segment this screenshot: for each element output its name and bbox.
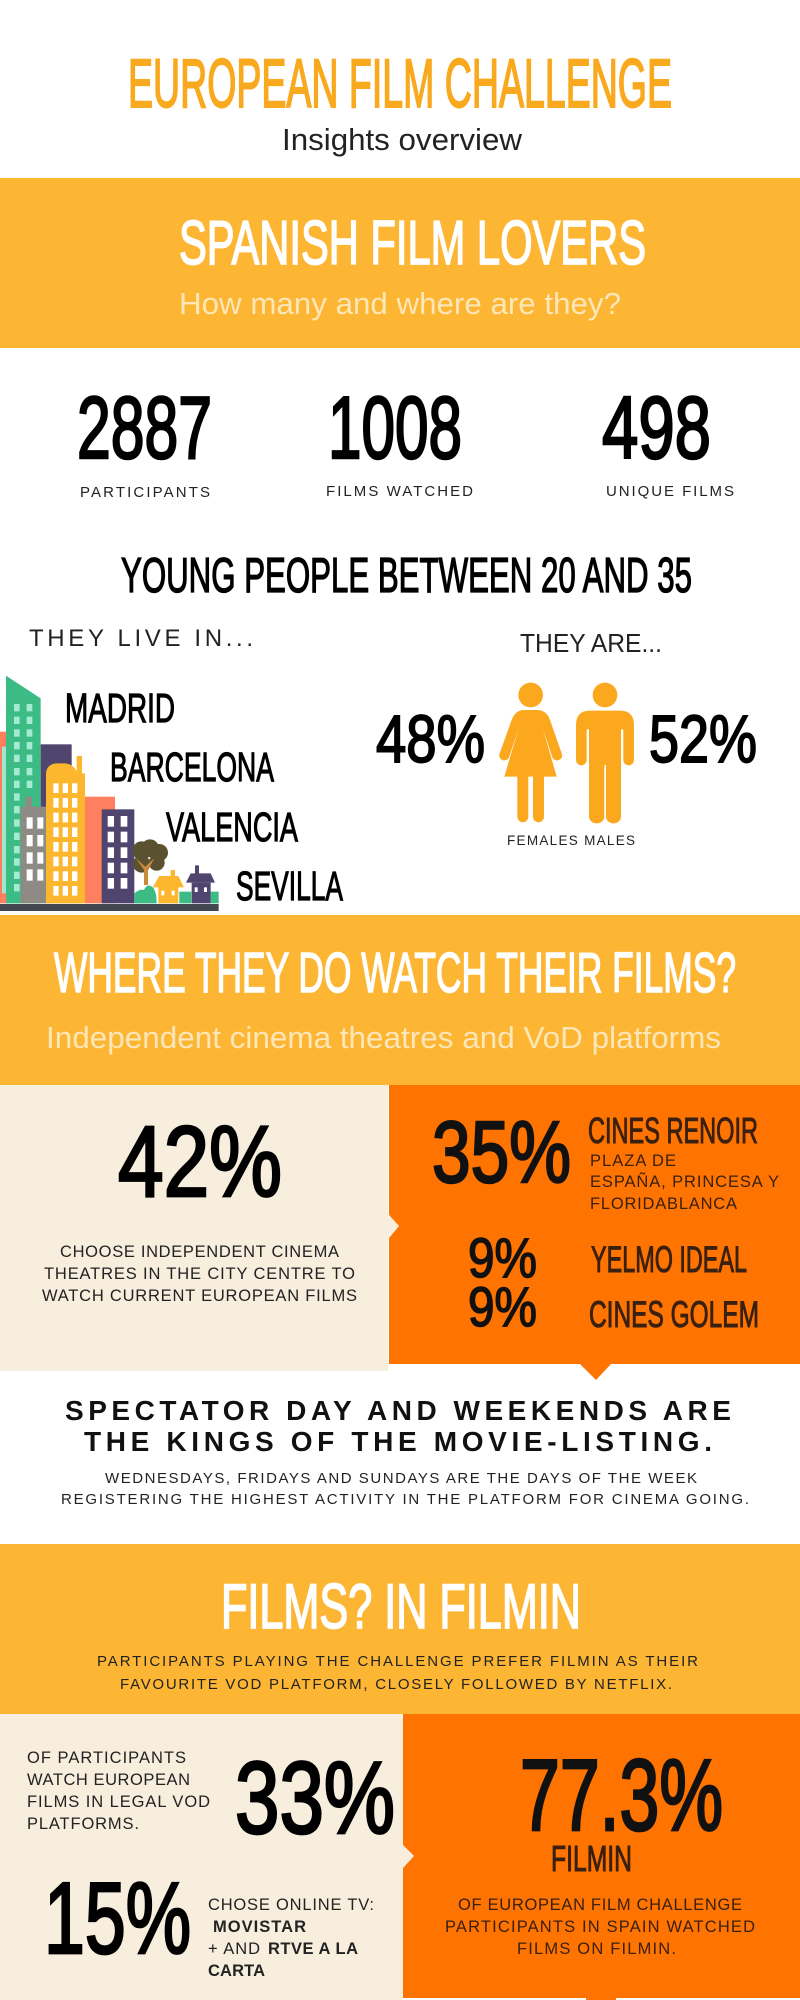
banner: films in Filmin <box>0 1544 800 1714</box>
stat: 9 percent second: 9% <box>468 1275 537 1338</box>
section text: REGISTERING THE HIGHEST ACTIVITY IN THE PLATFORM FOR CINEMA GOING. <box>61 1491 749 1508</box>
icon: female figure <box>499 683 562 822</box>
banner: Spanish film lovers <box>0 178 800 348</box>
section text <box>61 1470 749 1508</box>
text: participants legal VoD: FILMS IN LEGAL VOD <box>27 1793 210 1811</box>
banner text <box>97 1653 698 1693</box>
text: online TV: + AND <box>208 1940 260 1958</box>
label: they live in: THEY LIVE IN... <box>29 625 253 652</box>
city list <box>65 685 343 909</box>
stat: 9 percent: 9% <box>468 1226 537 1289</box>
banner subheading: Independent cinema theatres and VoD platforms <box>46 1020 721 1055</box>
panel text: PARTICIPANTS IN SPAIN WATCHED <box>445 1918 755 1936</box>
panel text <box>42 1243 357 1305</box>
stat: 48 percent females: 48% <box>376 702 485 777</box>
panel text: WATCH CURRENT EUROPEAN FILMS <box>42 1287 357 1305</box>
text: participants legal VoD: OF PARTICIPANTS <box>27 1749 186 1767</box>
stat: participants <box>77 378 212 501</box>
stat: 15 percent: 15% <box>44 1863 191 1975</box>
city: Barcelona: BARCELONA <box>110 744 274 790</box>
stat: unique films: UNIQUE FILMS <box>606 483 734 500</box>
city: Valencia: VALENCIA <box>166 804 298 850</box>
text: online TV: CARTA <box>208 1962 265 1980</box>
gender split <box>376 683 757 848</box>
cinema locations: FLORIDABLANCA <box>590 1195 737 1213</box>
label: they are: THEY ARE... <box>520 628 662 658</box>
banner text: PARTICIPANTS PLAYING THE CHALLENGE PREFER FILMIN AS THEIR <box>97 1653 698 1670</box>
text: online TV: CHOSE ONLINE TV: <box>208 1896 374 1914</box>
stat: films watched <box>326 378 473 500</box>
panel text: OF EUROPEAN FILM CHALLENGE <box>458 1896 742 1914</box>
icon: city skyline <box>0 676 219 911</box>
cinema locations: ESPAÑA, PRINCESA Y <box>590 1171 779 1191</box>
panel text <box>445 1896 755 1958</box>
cinema locations: PLAZA DE <box>590 1152 676 1170</box>
subtitle: Insights overview <box>282 122 523 157</box>
icon: male figure <box>576 683 634 823</box>
panel: cinema ranking <box>389 1085 800 1380</box>
key stats row <box>77 378 734 501</box>
section heading <box>65 1395 731 1457</box>
labels: females males: FEMALES MALES <box>507 833 635 848</box>
stat: participants: 2887 <box>77 378 212 477</box>
text: online TV: MOVISTAR <box>213 1918 306 1936</box>
text: online TV <box>208 1896 374 1980</box>
stat: 42 percent: 42% <box>118 1106 282 1218</box>
cinema locations <box>590 1152 779 1213</box>
panel text: THEATRES IN THE CITY CENTRE TO <box>44 1265 355 1283</box>
label: Filmin: FILMIN <box>551 1838 632 1879</box>
section: spectator day <box>61 1395 749 1508</box>
stat: films watched: 1008 <box>328 378 462 477</box>
text: participants legal VoD: PLATFORMS. <box>27 1815 139 1833</box>
banner subheading: How many and where are they? <box>179 286 621 321</box>
city: Madrid: MADRID <box>65 685 175 731</box>
banner text: FAVOURITE VOD PLATFORM, CLOSELY FOLLOWED BY NETFLIX. <box>120 1676 672 1693</box>
panel: independent cinema <box>0 1085 399 1371</box>
stat: participants: PARTICIPANTS <box>80 484 210 501</box>
header <box>128 45 672 157</box>
banner heading: FILMS? IN FILMIN <box>221 1572 581 1642</box>
stat: unique films: 498 <box>602 378 711 477</box>
panel text: CHOOSE INDEPENDENT CINEMA <box>60 1243 339 1261</box>
section text: WEDNESDAYS, FRIDAYS AND SUNDAYS ARE THE DAYS OF THE WEEK <box>105 1470 697 1487</box>
text: participants legal VoD: WATCH EUROPEAN <box>27 1771 190 1789</box>
text: online TV: RTVE A LA <box>268 1940 358 1958</box>
panel: Filmin share <box>403 1714 800 2000</box>
city: Sevilla: SEVILLA <box>236 863 343 909</box>
stat: 52 percent males: 52% <box>649 702 757 777</box>
banner: where they watch <box>0 915 800 1085</box>
panel: VoD and online TV <box>0 1714 414 2000</box>
section heading: THE KINGS OF THE MOVIE-LISTING. <box>84 1426 712 1457</box>
stat: 33 percent: 33% <box>235 1741 395 1855</box>
section heading: SPECTATOR DAY AND WEEKENDS ARE <box>65 1395 731 1426</box>
text: participants legal VoD <box>27 1749 210 1833</box>
stat: 77.3 percent: 77.3% <box>520 1740 723 1852</box>
stat: 35 percent: 35% <box>432 1104 571 1201</box>
panel text: FILMS ON FILMIN. <box>517 1940 676 1958</box>
stat: films watched: FILMS WATCHED <box>326 483 473 500</box>
